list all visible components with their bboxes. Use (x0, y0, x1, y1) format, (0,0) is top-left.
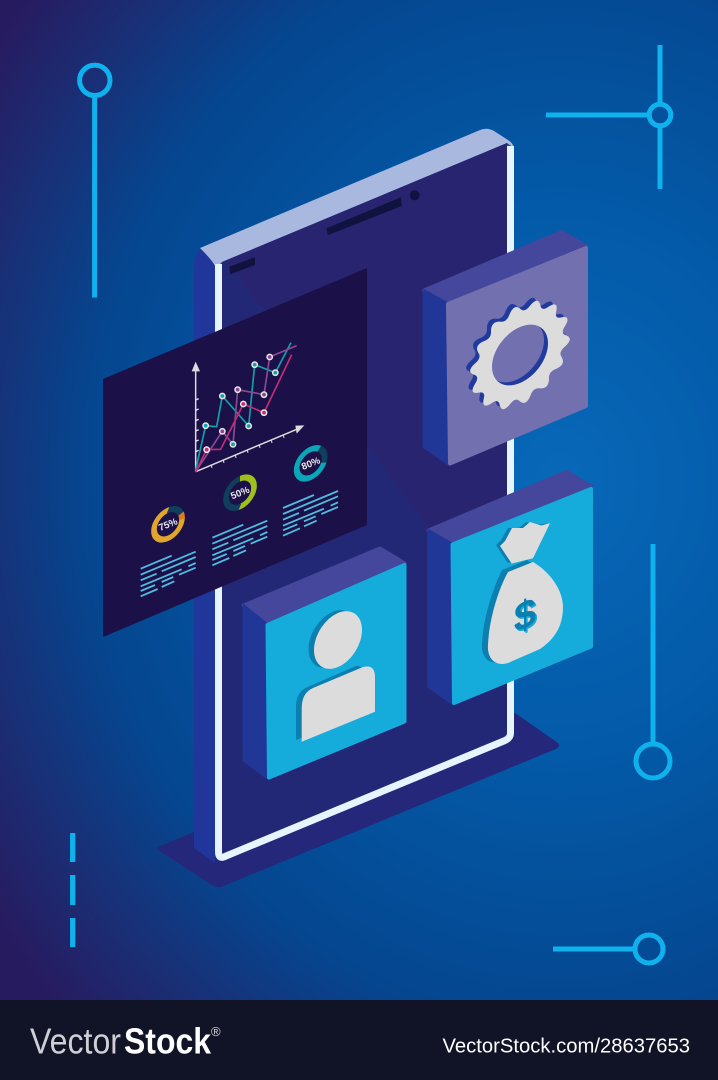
text lines: column 2 (212, 521, 267, 565)
chart axes (192, 362, 304, 472)
speaker slot (327, 197, 402, 235)
bag tile left (428, 530, 453, 704)
gear tile top (424, 232, 586, 304)
decoration: bottom-left dashes (70, 833, 75, 947)
donut: 80%: 80% (300, 455, 322, 473)
line chart (192, 343, 304, 472)
tile: person (244, 548, 404, 778)
donut: 50%: 50% (229, 485, 252, 502)
series: pink (196, 355, 292, 472)
dollar sign: $ (514, 587, 536, 642)
gear tile face (448, 248, 586, 464)
smartphone (194, 129, 514, 863)
ground shadow (157, 713, 559, 887)
decoration: top-left pin (80, 65, 110, 298)
icon: money bag (482, 522, 563, 664)
decoration: top-right crosshair (546, 45, 671, 189)
panel: dashboard (103, 268, 367, 637)
decoration: bottom-right pin (553, 935, 663, 963)
bag tile face (452, 489, 591, 703)
series: purple (196, 346, 297, 472)
footer bar (0, 1000, 718, 1080)
phone screen (222, 143, 507, 853)
tile: money bag (428, 472, 591, 704)
left sensor slot (229, 257, 255, 274)
donut: 75%: 75% (157, 516, 180, 534)
purple markers (220, 354, 272, 434)
icon: gear (466, 281, 570, 426)
panel content (141, 343, 338, 596)
gear tile left (424, 290, 448, 464)
teal markers (203, 362, 278, 447)
icon: person (296, 602, 375, 742)
image id: VectorStock.com/28637653 (442, 1036, 690, 1058)
decoration: right pin (636, 544, 670, 778)
text lines: column 3 (283, 491, 338, 536)
series: teal (196, 343, 291, 470)
donut: 75% (150, 498, 186, 550)
person tile face (268, 565, 404, 778)
logo wordmark: Vector (30, 1020, 121, 1062)
phone bezel (218, 146, 510, 857)
camera (410, 190, 420, 200)
pink markers (204, 401, 267, 452)
donut: 50% (226, 473, 254, 513)
text lines: column 1 (141, 552, 196, 596)
phone left side (194, 249, 220, 863)
person tile left (244, 605, 267, 778)
footer bar: Stock (124, 1020, 212, 1062)
footer bar: ® (211, 1024, 221, 1039)
bag tile top (428, 472, 591, 544)
tile: gear (424, 232, 586, 464)
phone top edge (200, 129, 514, 268)
person tile top (244, 548, 404, 625)
screen lighter diagonal (222, 262, 507, 853)
donut: 80% (293, 438, 329, 489)
dollar sign: $ (515, 589, 538, 643)
